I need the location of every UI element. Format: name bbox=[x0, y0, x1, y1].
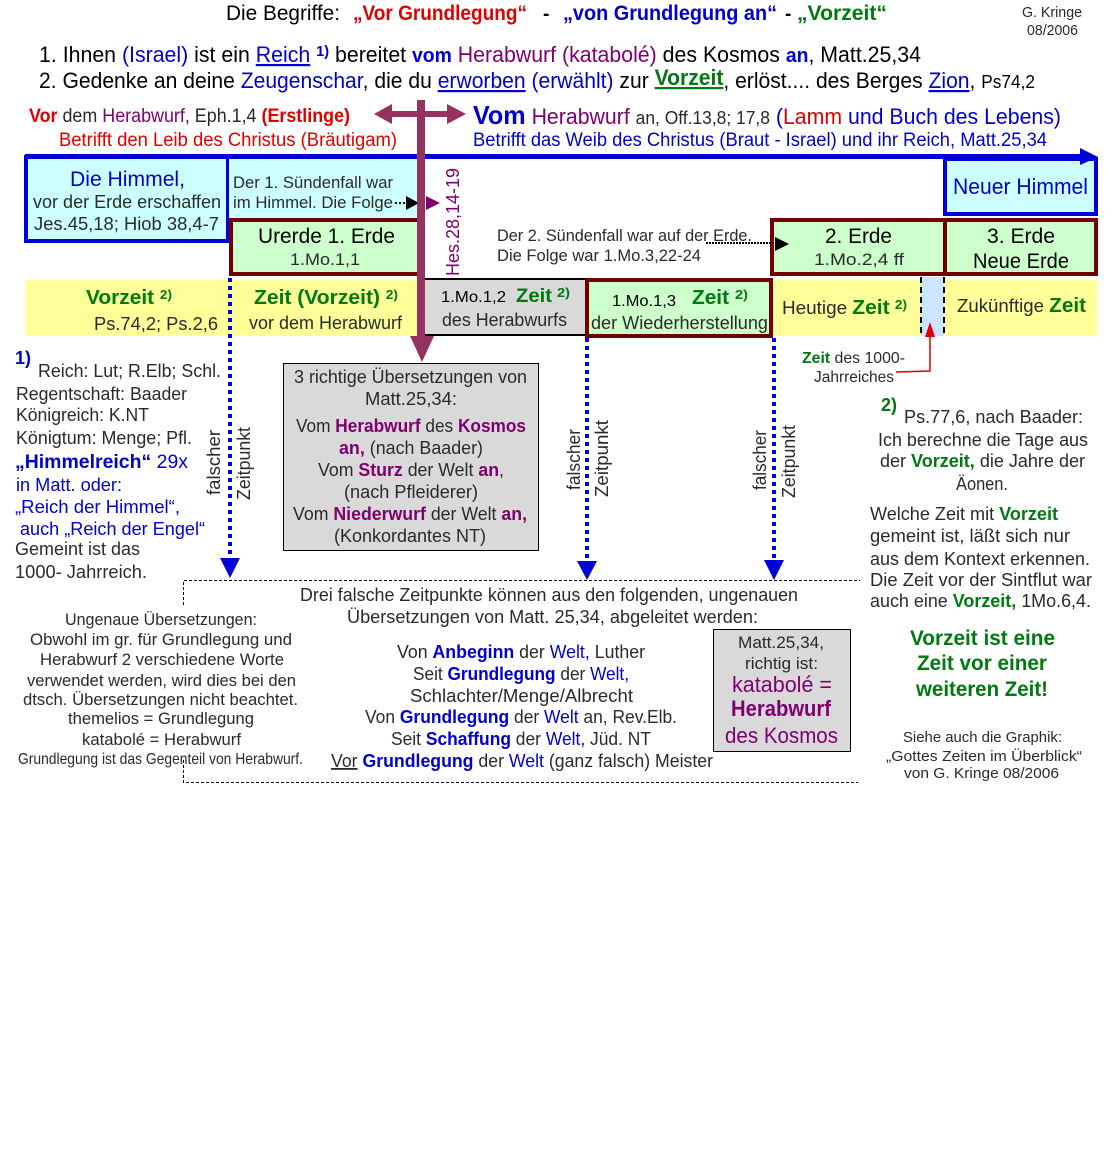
panel: three correct translations bbox=[284, 364, 538, 550]
panel: correct meaning: katabolé = bbox=[732, 672, 832, 697]
label: thousand-year kingdom callout: Jahrreiches bbox=[814, 369, 894, 386]
time cell: present time: 2) bbox=[895, 297, 907, 312]
footnote 2: Äonen. bbox=[956, 474, 1008, 494]
footnote 1: Königtum: Menge; Pfl. bbox=[16, 428, 192, 448]
time cell: Vorzeit: 2) bbox=[160, 287, 172, 302]
title: „Vor Grundlegung“ bbox=[353, 2, 527, 25]
heading: from the Herabwurf bbox=[473, 100, 1061, 151]
arrow: false point in time 2: Zeitpunkt bbox=[592, 420, 612, 497]
panel: correct meaning: des Kosmos bbox=[725, 723, 838, 748]
footnote 2: 2) bbox=[881, 395, 897, 415]
panel: three false dates: Vor Grundlegung der Welt (ganz falsch) Meister bbox=[331, 751, 713, 771]
heading: from the Herabwurf: Betrifft das Weib des Christus (Braut - Israel) und ihr Reich, Matt.25,34 bbox=[473, 130, 1047, 151]
panel: second earth: 1.Mo.2,4 ff bbox=[814, 250, 904, 269]
panel: three false dates: Schlachter/Menge/Albrecht bbox=[410, 686, 633, 706]
icon: purple arrow bbox=[426, 196, 440, 210]
footnote 2: Die Zeit vor der Sintflut war bbox=[870, 570, 1092, 590]
footnote 1: 1) bbox=[15, 348, 31, 368]
panel: three correct translations: (Konkordantes NT) bbox=[334, 526, 486, 546]
arrow: false point in time 1: Zeitpunkt bbox=[234, 427, 254, 500]
panel: heavens bbox=[26, 157, 228, 241]
panel: first fall: Der 1. Sündenfall war bbox=[233, 173, 393, 192]
verse line 2: , erlöst.... des Berges bbox=[723, 68, 929, 93]
second fall note: Der 2. Sündenfall war auf der Erde. bbox=[497, 226, 752, 245]
time cell: Vorzeit: Vorzeit bbox=[86, 287, 151, 309]
panel: three false dates: Übersetzungen von Matt. 25,34, abgeleitet werden: bbox=[347, 607, 758, 627]
footnote 2: Ps.77,6, nach Baader: bbox=[904, 407, 1083, 427]
panel: first earth: 1.Mo.1,1 bbox=[290, 250, 360, 269]
time cell: Vorzeit: Ps.74,2; Ps.2,6 bbox=[94, 314, 218, 334]
verse line 1: 1. Ihnen (Israel) ist ein Reich bbox=[39, 42, 312, 67]
time cell: Zeit of restoration bbox=[587, 280, 771, 336]
footnote 2: Welche Zeit mit Vorzeit bbox=[870, 504, 1058, 524]
footnote 1: auch „Reich der Engel“ bbox=[20, 519, 205, 539]
inexact translations note: Grundlegung ist das Gegenteil von Herabwurf. bbox=[18, 751, 303, 768]
footnote 2: aus dem Kontext erkennen. bbox=[870, 549, 1090, 569]
panel: heavens: Die Himmel, bbox=[70, 168, 185, 191]
time cell: Zeit before the Herabwurf: Zeit (Vorzeit) bbox=[254, 287, 374, 309]
label: thousand-year kingdom callout bbox=[802, 322, 935, 386]
author and date bbox=[1022, 4, 1082, 39]
panel: three false dates: Seit Schaffung der Welt, Jüd. NT bbox=[391, 729, 651, 749]
verse line 2: Vorzeit bbox=[655, 65, 724, 90]
footnote 1: Gemeint ist das bbox=[15, 539, 140, 559]
conclusion statement bbox=[910, 627, 1055, 701]
inexact translations note: Obwohl im gr. für Grundlegung und bbox=[30, 630, 292, 649]
panel: second earth: 2. Erde bbox=[825, 225, 892, 248]
time cell: Zeit of the Herabwurf: 1.Mo.1,2 bbox=[441, 289, 506, 306]
see also note: Siehe auch die Graphik: bbox=[903, 729, 1062, 746]
panel: correct meaning: Matt.25,34, bbox=[738, 633, 824, 652]
title bbox=[226, 2, 887, 25]
time cell: Zeit of the Herabwurf: 2) bbox=[557, 285, 570, 300]
time cell: Zeit of restoration: der Wiederherstellung bbox=[591, 313, 768, 333]
panel: three false dates: Von Grundlegung der Welt an, Rev.Elb. bbox=[365, 707, 677, 727]
arrow: false point in time 2 bbox=[564, 338, 612, 580]
arrow: central cross marker bbox=[374, 100, 466, 362]
inexact translations note: verwendet werden, wird dies bei den bbox=[27, 671, 296, 690]
time cell: future time: Zukünftige Zeit bbox=[957, 295, 1086, 317]
panel: first earth bbox=[231, 220, 419, 274]
panel: three correct translations: (nach Pfleiderer) bbox=[344, 482, 478, 502]
conclusion statement: Zeit vor einer bbox=[917, 652, 1047, 675]
time cell: Zeit of the Herabwurf bbox=[423, 279, 587, 335]
yellow time band bbox=[25, 280, 1097, 336]
inexact translations note: katabolé = Herabwurf bbox=[82, 730, 241, 749]
arrow: false point in time 3: Zeitpunkt bbox=[779, 425, 799, 498]
arrow: false point in time 3 bbox=[750, 338, 799, 580]
footnote 1: Regentschaft: Baader bbox=[16, 384, 187, 404]
rotated reference: Hes.28,14-19 bbox=[443, 168, 463, 276]
time cell: Zeit before the Herabwurf: vor dem Herabwurf bbox=[249, 313, 403, 333]
panel: first fall bbox=[229, 159, 419, 219]
time cell: thousand-year kingdom bbox=[921, 277, 944, 336]
timeline arrow bbox=[25, 148, 1098, 165]
time cell: Zeit before the Herabwurf bbox=[249, 287, 403, 333]
time cell: Zeit of restoration: Zeit bbox=[692, 287, 729, 309]
panel: second earth bbox=[772, 220, 945, 274]
heading: before the Herabwurf: Vor dem Herabwurf, Eph.1,4 (Erstlinge) bbox=[29, 106, 350, 127]
panel: new heaven bbox=[945, 159, 1096, 214]
see also note: „Gottes Zeiten im Überblick“ bbox=[886, 747, 1082, 765]
panel: three false dates: Von Anbeginn der Welt, Luther bbox=[397, 642, 645, 662]
verse line 2: 2. Gedenke an deine Zeugenschar, die du erworben (erwählt) zur bbox=[39, 68, 650, 93]
panel: heavens: Jes.45,18; Hiob 38,4-7 bbox=[34, 214, 219, 234]
verse line 2: Zion, Ps74,2 bbox=[929, 68, 1037, 93]
arrow: false point in time 1: falscher bbox=[204, 430, 224, 495]
panel: three correct translations: an, (nach Baader) bbox=[339, 438, 483, 458]
arrow: false point in time 2: falscher bbox=[564, 429, 584, 490]
panel: correct meaning: richtig ist: bbox=[745, 654, 818, 673]
inexact translations note bbox=[18, 610, 303, 768]
title: „von Grundlegung an“ bbox=[563, 2, 777, 25]
arrow: false point in time 1 bbox=[204, 278, 254, 578]
panel: heavens: vor der Erde erschaffen bbox=[33, 192, 221, 212]
panel: three correct translations: Vom Herabwurf des Kosmos bbox=[296, 416, 526, 436]
verse line 1: bereitet bbox=[329, 42, 412, 67]
heading: from the Herabwurf: Vom Herabwurf an, Off.13,8; 17,8 (Lamm und Buch des Lebens) bbox=[473, 100, 1061, 130]
second fall note bbox=[497, 226, 789, 265]
time cell: Zeit of the Herabwurf: Zeit bbox=[516, 286, 553, 307]
panel: correct meaning: Herabwurf bbox=[731, 696, 832, 721]
inexact translations note: Herabwurf 2 verschiedene Worte bbox=[40, 650, 284, 669]
panel: third earth bbox=[945, 220, 1096, 274]
panel: new heaven: Neuer Himmel bbox=[953, 174, 1088, 199]
panel: first earth: Urerde 1. Erde bbox=[258, 225, 395, 248]
time cell: Zeit before the Herabwurf: 2) bbox=[386, 287, 398, 302]
verse line 1: 1) bbox=[316, 43, 329, 60]
footnote 2: gemeint ist, läßt sich nur bbox=[870, 526, 1070, 546]
panel: three false dates: Seit Grundlegung der Welt, bbox=[413, 664, 629, 684]
title: - bbox=[543, 4, 549, 25]
conclusion statement: weiteren Zeit! bbox=[915, 678, 1048, 701]
author and date: G. Kringe bbox=[1022, 4, 1082, 21]
see also note: von G. Kringe 08/2006 bbox=[904, 765, 1059, 782]
footnote 1: „Reich der Himmel“, bbox=[15, 497, 180, 517]
panel: three correct translations: Vom Niederwurf der Welt an, bbox=[293, 504, 527, 524]
footnote 1: Reich: Lut; R.Elb; Schl. bbox=[38, 361, 221, 381]
heading: before the Herabwurf: Betrifft den Leib des Christus (Bräutigam) bbox=[59, 130, 397, 151]
time cell: Zeit of the Herabwurf: des Herabwurfs bbox=[442, 310, 567, 330]
time cell: Vorzeit bbox=[86, 287, 218, 334]
panel: third earth: Neue Erde bbox=[973, 250, 1069, 273]
footnote 1 bbox=[15, 348, 221, 582]
panel: third earth: 3. Erde bbox=[987, 225, 1055, 248]
footnote 1: Königreich: K.NT bbox=[16, 405, 149, 425]
panel: first fall: im Himmel. Die Folge bbox=[233, 193, 393, 212]
heading: before the Herabwurf bbox=[29, 106, 397, 151]
footnote 2 bbox=[870, 395, 1092, 611]
footnote 1: 1000- Jahrreich. bbox=[15, 562, 147, 582]
conclusion statement: Vorzeit ist eine bbox=[910, 627, 1055, 650]
panel: correct meaning bbox=[714, 630, 850, 752]
time cell: Zeit of restoration: 1.Mo.1,3 bbox=[612, 293, 676, 310]
see also note bbox=[886, 729, 1082, 782]
inexact translations note: Ungenaue Übersetzungen: bbox=[65, 610, 257, 629]
time cell: Zeit of restoration: 2) bbox=[735, 287, 748, 302]
panel: three correct translations: Vom Sturz der Welt an, bbox=[318, 460, 504, 480]
arrow: false point in time 3: falscher bbox=[750, 430, 770, 490]
title: „Vorzeit“ bbox=[797, 2, 887, 25]
footnote 2: der Vorzeit, die Jahre der bbox=[880, 451, 1085, 471]
time cell: present time: Heutige Zeit bbox=[782, 297, 888, 319]
panel: three false dates: Drei falsche Zeitpunkte können aus den folgenden, ungenauen bbox=[300, 585, 798, 605]
verse line 1: vom Herabwurf (katabolé) des Kosmos an, Matt.25,34 bbox=[412, 42, 925, 67]
inexact translations note: themelios = Grundlegung bbox=[68, 709, 254, 728]
title: - bbox=[785, 4, 791, 25]
panel: three false dates bbox=[184, 580, 860, 782]
footnote 1: „Himmelreich“ 29x bbox=[15, 452, 189, 473]
inexact translations note: dtsch. Übersetzungen nicht beachtet. bbox=[23, 690, 298, 709]
author and date: 08/2006 bbox=[1027, 22, 1078, 39]
footnote 1: in Matt. oder: bbox=[16, 475, 122, 495]
label: thousand-year kingdom callout: Zeit des 1000- bbox=[802, 350, 905, 367]
title: Die Begriffe: bbox=[226, 2, 340, 25]
second fall note: Die Folge war 1.Mo.3,22-24 bbox=[497, 246, 701, 265]
footnote 2: Ich berechne die Tage aus bbox=[878, 430, 1088, 450]
panel: three correct translations: 3 richtige Übersetzungen von bbox=[294, 367, 527, 387]
panel: three correct translations: Matt.25,34: bbox=[365, 389, 457, 409]
footnote 2: auch eine Vorzeit, 1Mo.6,4. bbox=[870, 591, 1091, 611]
